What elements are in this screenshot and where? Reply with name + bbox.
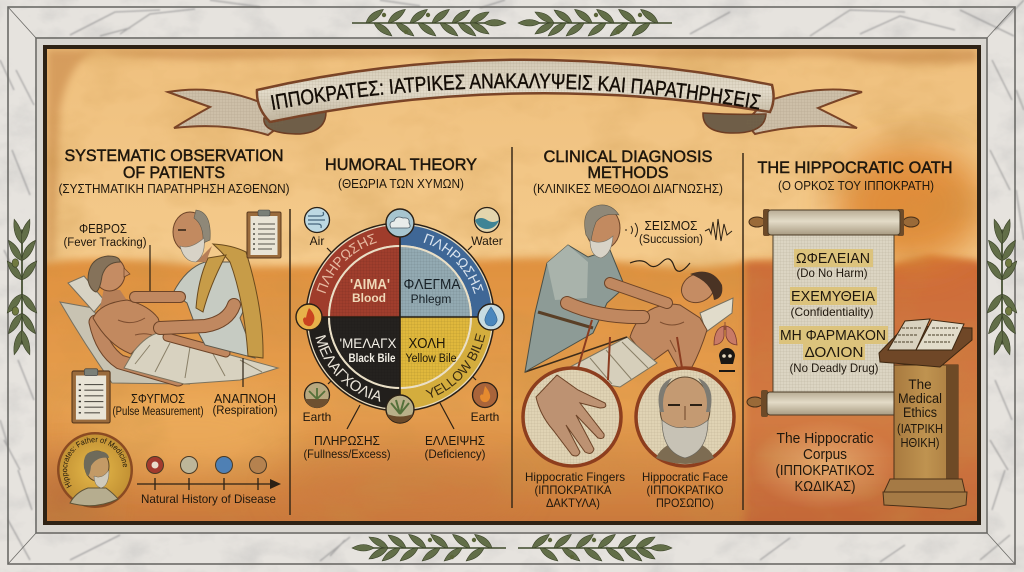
banner folds <box>264 112 766 134</box>
label: deficiency: ΕΛΛΕΙΨΗΣ <box>425 433 485 448</box>
icon: air: Air <box>310 234 324 248</box>
icon: earth right flame: Earth <box>471 410 499 424</box>
label: fullness <box>304 433 391 461</box>
banner right tail <box>745 90 862 134</box>
icon: earth right flame <box>471 382 499 424</box>
panel: hippocratic oath <box>747 158 972 510</box>
olive sprig right <box>985 218 1019 356</box>
scroll <box>747 209 919 417</box>
banner left tail <box>168 90 285 135</box>
label: hippocratic fingers <box>525 470 625 510</box>
heading: (ΚΛΙΝΙΚΕΣ ΜΕΘΟΔΟΙ ΔΙΑΓΝΩΣΗΣ) <box>533 181 723 196</box>
lectern text: The <box>908 377 932 392</box>
ring labels: ΠΛΗΡΩΣΗΣ <box>316 234 377 294</box>
quadrant: yellow bile <box>400 317 471 388</box>
heading: (Ο ΟΡΚΟΣ ΤΟΥ ΙΠΠΟΚΡΑΤΗ) <box>778 178 934 193</box>
panel: systematic observation <box>57 146 290 508</box>
olive sprig left <box>5 218 39 356</box>
icon: water <box>471 208 503 248</box>
label: deficiency <box>424 433 486 461</box>
quadrant labels: Black Bile <box>348 353 396 365</box>
lectern text: Ethics <box>903 405 937 420</box>
medallion: father of medicine: Hippocrates: Father of Medicine <box>62 437 128 488</box>
inset: hippocratic face <box>636 368 734 466</box>
title banner <box>164 58 862 136</box>
label: hippocratic corpus: The Hippocratic <box>776 430 874 447</box>
heading: HUMORAL THEORY <box>325 155 477 174</box>
heading <box>325 155 477 191</box>
label: hippocratic corpus: ΚΩΔΙΚΑΣ) <box>794 478 856 495</box>
heading: SYSTEMATIC OBSERVATION <box>64 146 284 165</box>
lectern top board <box>879 326 972 367</box>
quadrant labels: 'ΜΕΛΑΓΧ <box>340 335 397 351</box>
oath: do no harm: ΩΦΕΛΕΙΑΝ <box>796 250 870 267</box>
icon: sound <box>625 223 638 237</box>
banner band <box>257 60 774 122</box>
heading: THE HIPPOCRATIC OATH <box>758 158 952 177</box>
ring labels: ΜΕΛΑΓΧΟΛΙΑ <box>316 334 380 402</box>
panel: clinical diagnosis <box>523 147 737 510</box>
timeline: natural history of disease <box>137 456 281 506</box>
quadrant: black bile <box>329 317 400 388</box>
scroll bottom roller <box>747 390 897 417</box>
label: fullness: ΠΛΗΡΩΣΗΣ <box>314 433 380 448</box>
lectern text <box>897 377 943 450</box>
label: hippocratic face: (ΙΠΠΟΚΡΑΤΙΚΟ <box>646 483 724 497</box>
oath: do no harm <box>794 249 873 280</box>
label: succussion: (Succussion) <box>639 234 703 246</box>
lectern column <box>894 365 958 483</box>
heading <box>758 158 952 193</box>
icon: clipboard top <box>247 210 281 258</box>
oath: confidentiality: ΕΧΕΜΥΘΕΙΑ <box>791 288 875 305</box>
icon: skull <box>719 348 735 371</box>
humoral wheel <box>295 208 505 424</box>
icon: earth left: Earth <box>303 410 331 424</box>
label: hippocratic corpus <box>750 420 900 510</box>
quadrant labels: Yellow Bile <box>406 353 456 365</box>
icon: flame left <box>296 304 322 330</box>
lectern text: (ΙΑΤΡΙΚΗ <box>897 421 943 436</box>
label: deficiency: (Deficiency) <box>424 447 486 461</box>
quadrant labels <box>340 277 461 365</box>
lectern base <box>883 479 967 509</box>
icon: plant bottom <box>386 395 414 423</box>
inset: hippocratic fingers <box>523 368 621 466</box>
scroll top roller <box>749 209 919 236</box>
heading: METHODS <box>588 163 668 182</box>
illustration: patient <box>525 268 733 387</box>
label: hippocratic fingers: (ΙΠΠΟΚΡΑΤΙΚΑ <box>534 483 612 497</box>
label: hippocratic face: Hippocratic Face <box>642 470 728 484</box>
medallion: father of medicine <box>57 432 133 508</box>
label: hippocratic face: ΠΡΟΣΩΠΟ) <box>656 496 714 510</box>
label: fever: (Fever Tracking) <box>64 237 147 249</box>
oath: do no harm: (Do No Harm) <box>796 266 868 280</box>
timeline: natural history of disease: Natural History of Disease <box>141 492 276 506</box>
label: pulse: (Pulse Measurement) <box>112 406 204 418</box>
label: pulse <box>112 391 204 418</box>
icon: clipboard bottom <box>72 369 110 423</box>
banner title: ΙΠΠΟΚΡΑΤΕΣ: ΙΑΤΡΙΚΕΣ ΑΝΑΚΑΛΥΨΕΙΣ ΚΑΙ ΠΑΡΑΤΗΡΗΣΕΙΣ <box>270 73 761 110</box>
ring labels <box>316 234 486 402</box>
oath: confidentiality: (Confidentiality) <box>790 305 874 319</box>
lectern text: Medical <box>898 391 942 406</box>
heading: OF PATIENTS <box>123 163 225 182</box>
label: respiration <box>212 358 278 417</box>
lectern with book <box>879 319 972 509</box>
label: hippocratic corpus: Corpus <box>803 446 847 463</box>
olive branch bottom <box>352 532 672 563</box>
label: hippocratic fingers: ΔΑΚΤΥΛΑ) <box>546 496 600 510</box>
connector lines <box>327 246 476 429</box>
icon: water: Water <box>471 234 503 248</box>
quadrant: phlegm <box>400 246 471 317</box>
quadrant labels: Blood <box>352 291 386 305</box>
connector lines to insets <box>578 320 682 380</box>
heading: (ΘΕΩΡΙΑ ΤΩΝ ΧΥΜΩΝ) <box>338 176 464 191</box>
quadrant labels: 'ΑΙΜΑ' <box>350 277 390 293</box>
label: fever <box>64 221 150 291</box>
ring: red <box>308 225 400 317</box>
heading <box>533 147 723 196</box>
quadrant labels: ΦΛΕΓΜΑ <box>404 277 461 293</box>
olive branch top <box>352 7 672 38</box>
label: hippocratic corpus: (ΙΠΠΟΚΡΑΤΙΚΟΣ <box>776 462 874 479</box>
icon: cloud top <box>386 209 414 237</box>
ring labels: YELLOW BILE <box>425 333 486 398</box>
label: fever: ΦΕΒΡΟΣ <box>79 221 127 236</box>
label: hippocratic fingers: Hippocratic Fingers <box>525 470 625 484</box>
quadrant labels: Phlegm <box>411 292 451 306</box>
ring: yellow <box>400 317 492 409</box>
illustration: patient on bed <box>60 255 278 384</box>
quadrant labels: ΧΟΛΗ <box>408 336 446 352</box>
label: hippocratic face <box>642 470 728 510</box>
label: succussion <box>639 218 703 246</box>
icon: sound wave <box>705 219 732 241</box>
oath: no deadly drug: (No Deadly Drug) <box>790 361 878 375</box>
heading: CLINICAL DIAGNOSIS <box>544 147 712 166</box>
label: pulse: ΣΦΥΓΜΟΣ <box>131 391 185 406</box>
panel: humoral theory <box>295 155 505 461</box>
icon: vibration wave <box>630 259 690 271</box>
quadrant: blood <box>329 246 400 317</box>
open book <box>888 319 930 350</box>
heading: (ΣΥΣΤΗΜΑΤΙΚΗ ΠΑΡΑΤΗΡΗΣΗ ΑΣΘΕΝΩΝ) <box>58 181 290 196</box>
oath: no deadly drug: ΔΟΛΙΟΝ <box>804 344 864 361</box>
icon: earth left <box>303 382 331 424</box>
dividers <box>290 147 743 515</box>
oath: no deadly drug: ΜΗ ΦΑΡΜΑΚΟΝ <box>780 327 886 344</box>
icon: water drop right <box>478 304 504 330</box>
ring: black <box>308 317 400 409</box>
ring: blue <box>400 225 492 317</box>
heading <box>58 146 290 196</box>
label: respiration: ΑΝΑΠΝΟΗ <box>214 391 276 406</box>
illustration: physician <box>525 205 667 372</box>
lectern text: ΗΘΙΚΗ) <box>900 435 940 450</box>
label: respiration: (Respiration) <box>212 405 278 417</box>
oath: confidentiality <box>790 287 877 319</box>
label: succussion: ΣΕΙΣΜΟΣ <box>644 218 698 233</box>
oath: no deadly drug <box>779 326 888 375</box>
icon: lungs <box>714 322 737 345</box>
ring labels: ΠΛΗΡΩΣΗΣ <box>424 234 484 294</box>
illustration: physician <box>135 210 263 358</box>
label: fullness: (Fullness/Excess) <box>304 447 391 461</box>
icon: air <box>304 208 330 248</box>
